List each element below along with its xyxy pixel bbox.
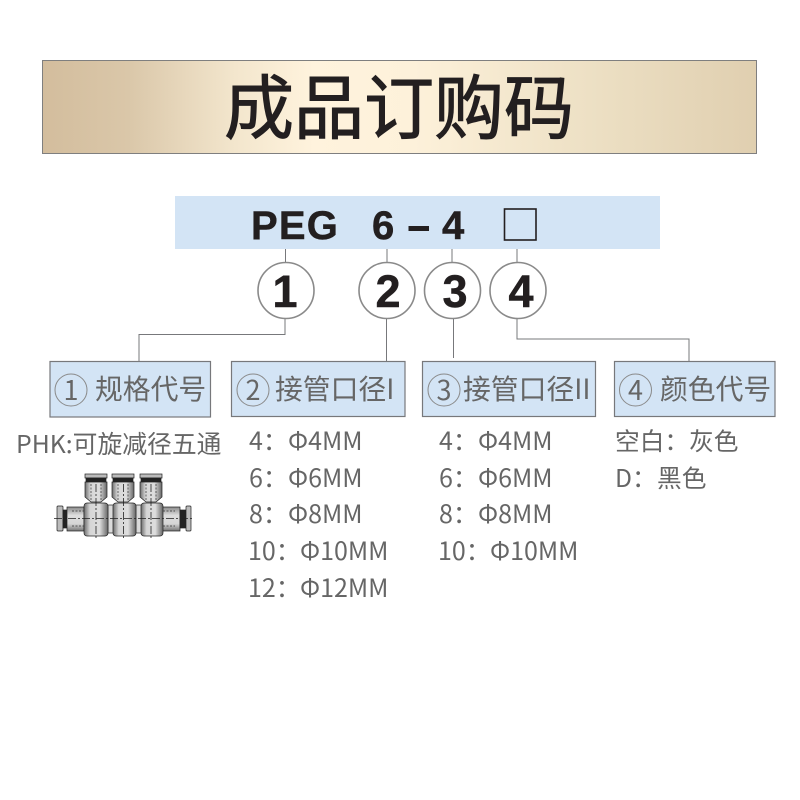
size list: port I: 4： — [249, 422, 288, 458]
connector lines — [139, 249, 689, 361]
label box 3: port size II: 接管口径II — [463, 368, 590, 408]
label box 1: spec code: 1 — [64, 369, 78, 408]
size list: port II: 6： — [439, 459, 478, 495]
size list: port II: 8： — [439, 495, 478, 531]
label box 3: port size II: 3 — [436, 369, 452, 408]
blank colour code square — [504, 209, 536, 240]
size list: port I: Φ6MM — [288, 459, 363, 495]
size list: port I: 8： — [249, 495, 288, 531]
model code text: 6 — [372, 204, 394, 248]
label box 1: spec code: 规格代号 — [95, 368, 206, 408]
colour list: D： — [615, 459, 657, 495]
right tube — [162, 507, 180, 531]
size list: port I: 6： — [249, 459, 288, 495]
body — [107, 505, 115, 533]
centre lines — [54, 484, 193, 540]
size list: port II — [438, 422, 578, 568]
size list: port II: 10： — [438, 532, 491, 568]
size list: port II: Φ6MM — [478, 459, 553, 495]
product type text: PHK:可旋减径五通 — [16, 425, 222, 461]
number circle 1 — [258, 262, 314, 318]
size list: port I: Φ10MM — [300, 532, 388, 568]
size list: port II: Φ10MM — [490, 532, 578, 568]
size list: port I: Φ8MM — [288, 495, 363, 531]
label box 4: colour code: 4 — [628, 369, 643, 408]
top ports — [85, 474, 107, 478]
size list: port II: Φ4MM — [478, 422, 553, 458]
number circle 3 — [424, 262, 480, 318]
model code text: 4 — [442, 204, 465, 248]
size list: port II: Φ8MM — [478, 495, 553, 531]
colour list: 空白：灰色 — [615, 422, 738, 458]
size list: port I: Φ4MM — [288, 422, 363, 458]
inner dashed details — [72, 484, 175, 526]
label box 2: port size I: 接管口径I — [275, 368, 394, 408]
size list: port II: 4： — [439, 422, 478, 458]
size list: port I: Φ12MM — [300, 569, 388, 605]
title: 成品订购码 — [224, 70, 574, 148]
number circle 2: 2 — [375, 266, 401, 317]
label box 4: colour code — [614, 362, 775, 416]
colour list — [615, 422, 738, 495]
label box 2: port size I — [232, 362, 405, 416]
left tube — [57, 506, 63, 531]
number circle 4: 4 — [508, 266, 534, 317]
label box 3: port size II — [422, 362, 596, 416]
label box 4: colour code: 颜色代号 — [660, 368, 771, 408]
label box 2: port size I: 2 — [246, 369, 260, 408]
icon: five-way reducer fitting — [54, 474, 193, 540]
title banner — [42, 60, 756, 154]
model code text: PEG — [251, 204, 339, 248]
label box 1: spec code — [50, 362, 210, 417]
number circle 1: 1 — [272, 266, 298, 317]
size list: port I: 10： — [248, 532, 301, 568]
number circle 4 — [490, 262, 546, 318]
size list: port I: 12： — [248, 569, 301, 605]
model code text — [251, 204, 465, 248]
number circle 2 — [359, 262, 415, 318]
colour list: 黑色 — [657, 459, 706, 495]
model code band — [175, 196, 660, 249]
number circle 3: 3 — [442, 266, 468, 317]
size list: port I — [248, 422, 388, 605]
